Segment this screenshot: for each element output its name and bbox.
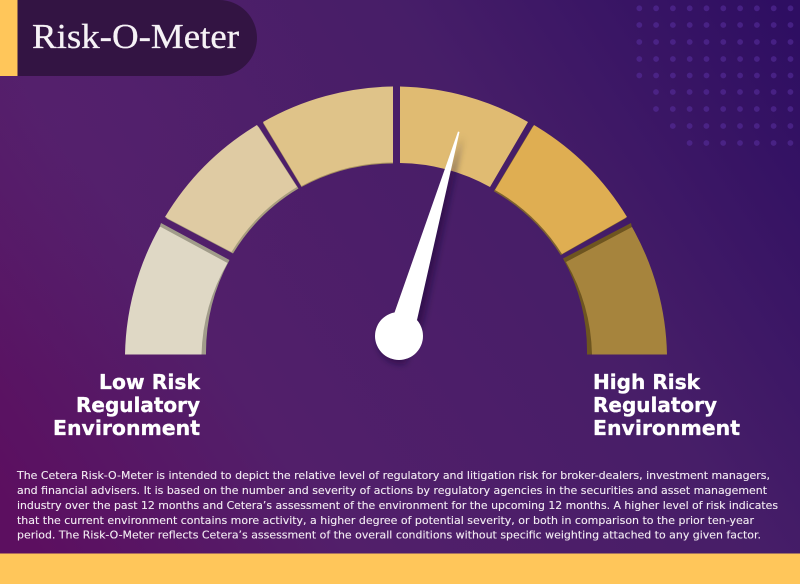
- disclaimer text: that the current environment contains more activity, a higher degree of potential severity, or both in comparison to the prior ten-year: [17, 514, 754, 527]
- segment 1: lowest risk: [125, 223, 230, 354]
- segment 3: [263, 86, 393, 187]
- disclaimer text: period. The Risk-O-Meter reflects Cetera’s assessment of the overall conditions without specific weighting attached to any given factor.: [17, 528, 761, 542]
- disclaimer text: [16, 469, 778, 542]
- disclaimer text: and financial advisers. It is based on the number and severity of actions by regulatory agencies in the securities and asset management: [17, 484, 768, 497]
- segment 4: [400, 86, 528, 187]
- segment 2: [165, 125, 298, 254]
- label: high risk: High Risk: [593, 370, 701, 394]
- segment 5: [494, 125, 627, 255]
- segment 6: highest risk: [563, 223, 667, 354]
- label: low risk: Regulatory: [76, 393, 200, 417]
- label: low risk: Environment: [53, 416, 200, 440]
- needle and hub shadow: [377, 136, 463, 364]
- label: low risk: Low Risk: [99, 370, 201, 394]
- title badge: [0, 0, 257, 76]
- title: Risk-O-Meter: [32, 17, 239, 56]
- gauge: [125, 86, 667, 354]
- label: high risk: Environment: [593, 416, 740, 440]
- bottom bar: [0, 554, 800, 584]
- gauge needle: [375, 132, 460, 360]
- disclaimer text: industry over the past 12 months and Cetera’s assessment of the environment for the upcoming 12 months. A higher level of risk indicates: [17, 499, 778, 512]
- disclaimer text: The Cetera Risk-O-Meter is intended to depict the relative level of regulatory and litigation risk for broker-dealers, investment managers,: [16, 469, 770, 482]
- label: high risk: Regulatory: [593, 393, 717, 417]
- label: low risk: [53, 370, 201, 440]
- label: high risk: [593, 370, 740, 440]
